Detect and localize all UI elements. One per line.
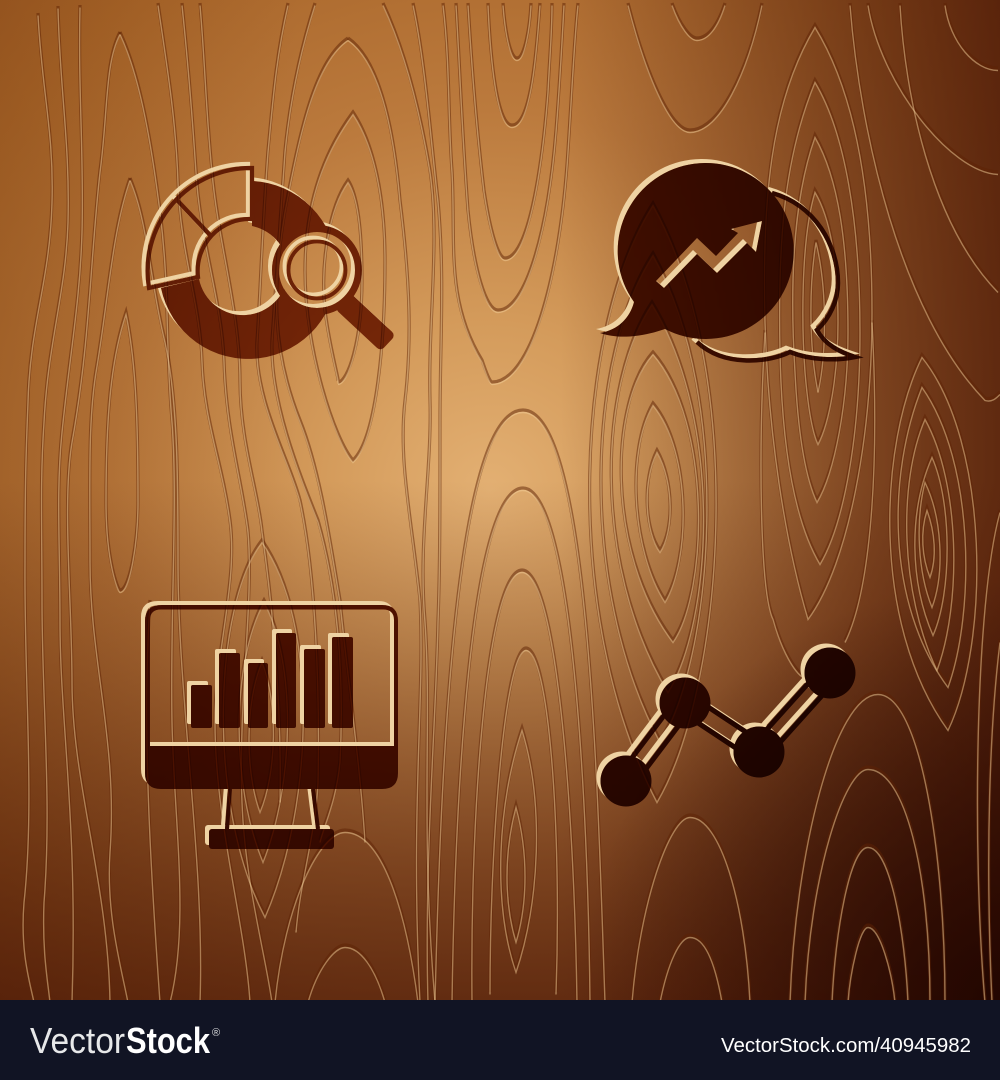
footer bar xyxy=(0,1000,1000,1080)
footer logo: Vector xyxy=(30,1020,125,1061)
icon: line graph with connected nodes xyxy=(596,644,856,806)
footer logo xyxy=(30,1020,220,1061)
icon: pie chart with magnifying glass xyxy=(144,164,396,359)
icon: monitor with bar chart xyxy=(141,601,398,849)
footer logo: Stock xyxy=(126,1020,211,1061)
footer logo: ® xyxy=(212,1027,220,1039)
icon: speech bubbles with rising arrow xyxy=(596,159,855,361)
footer image id: VectorStock.com/40945982 xyxy=(721,1035,971,1057)
